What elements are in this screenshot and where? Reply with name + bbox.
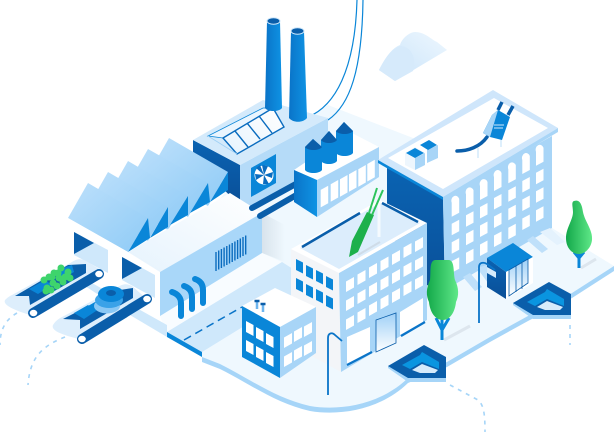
chimney 2 <box>289 28 307 122</box>
exhaust pipes <box>172 279 203 316</box>
ground platform <box>160 105 614 413</box>
power plant building <box>193 100 328 215</box>
entrance pavilion <box>487 243 533 299</box>
roof <box>378 90 558 197</box>
arrow tile 1 <box>513 282 571 319</box>
metal ring coil <box>94 286 124 314</box>
conveyor opening 2 <box>122 257 155 298</box>
tall office building <box>378 90 558 295</box>
green material pile <box>40 264 74 294</box>
icon: ventilation fan <box>251 154 276 197</box>
roof vents <box>405 139 438 170</box>
silos <box>305 122 353 173</box>
dashed flow lines <box>0 313 570 432</box>
conveyor belt 1 <box>5 259 103 316</box>
block shadow <box>262 213 285 262</box>
road <box>167 262 293 352</box>
street lamp 2 <box>479 263 495 323</box>
vent grating <box>216 236 246 271</box>
pen stand shadows <box>358 242 380 255</box>
double door <box>376 313 396 352</box>
cloud <box>379 32 447 81</box>
solar panel roof <box>208 108 284 154</box>
icon: power plug <box>457 102 513 158</box>
road dashes <box>184 307 242 340</box>
conveyor opening 1 <box>74 232 108 273</box>
white front windows <box>346 237 423 330</box>
silo building <box>294 122 379 217</box>
white windows <box>246 321 312 367</box>
long factory block <box>68 193 262 316</box>
conveyor belt 2 <box>53 284 151 342</box>
small building <box>242 288 316 378</box>
blue side windows <box>296 259 333 310</box>
arched windows <box>451 145 544 217</box>
roof vents <box>257 302 263 312</box>
power wires <box>308 0 363 120</box>
entrance canopy stripes <box>463 228 565 291</box>
central office with pen <box>291 188 427 372</box>
belt shadow strip <box>85 283 167 337</box>
rectangular windows <box>452 169 544 273</box>
tree 1 <box>427 260 458 340</box>
tree 2 <box>566 201 592 268</box>
sawtooth roofs <box>68 138 228 252</box>
windows <box>321 160 375 207</box>
ground floor shopfront <box>347 298 423 364</box>
street lamp 1 <box>328 333 342 395</box>
tree shadows <box>444 259 596 340</box>
pipe between buildings <box>252 180 312 216</box>
service strip <box>160 253 282 332</box>
icon: pen <box>349 188 383 257</box>
chimney 1 <box>265 18 282 111</box>
arrow tile 2 <box>388 345 446 382</box>
